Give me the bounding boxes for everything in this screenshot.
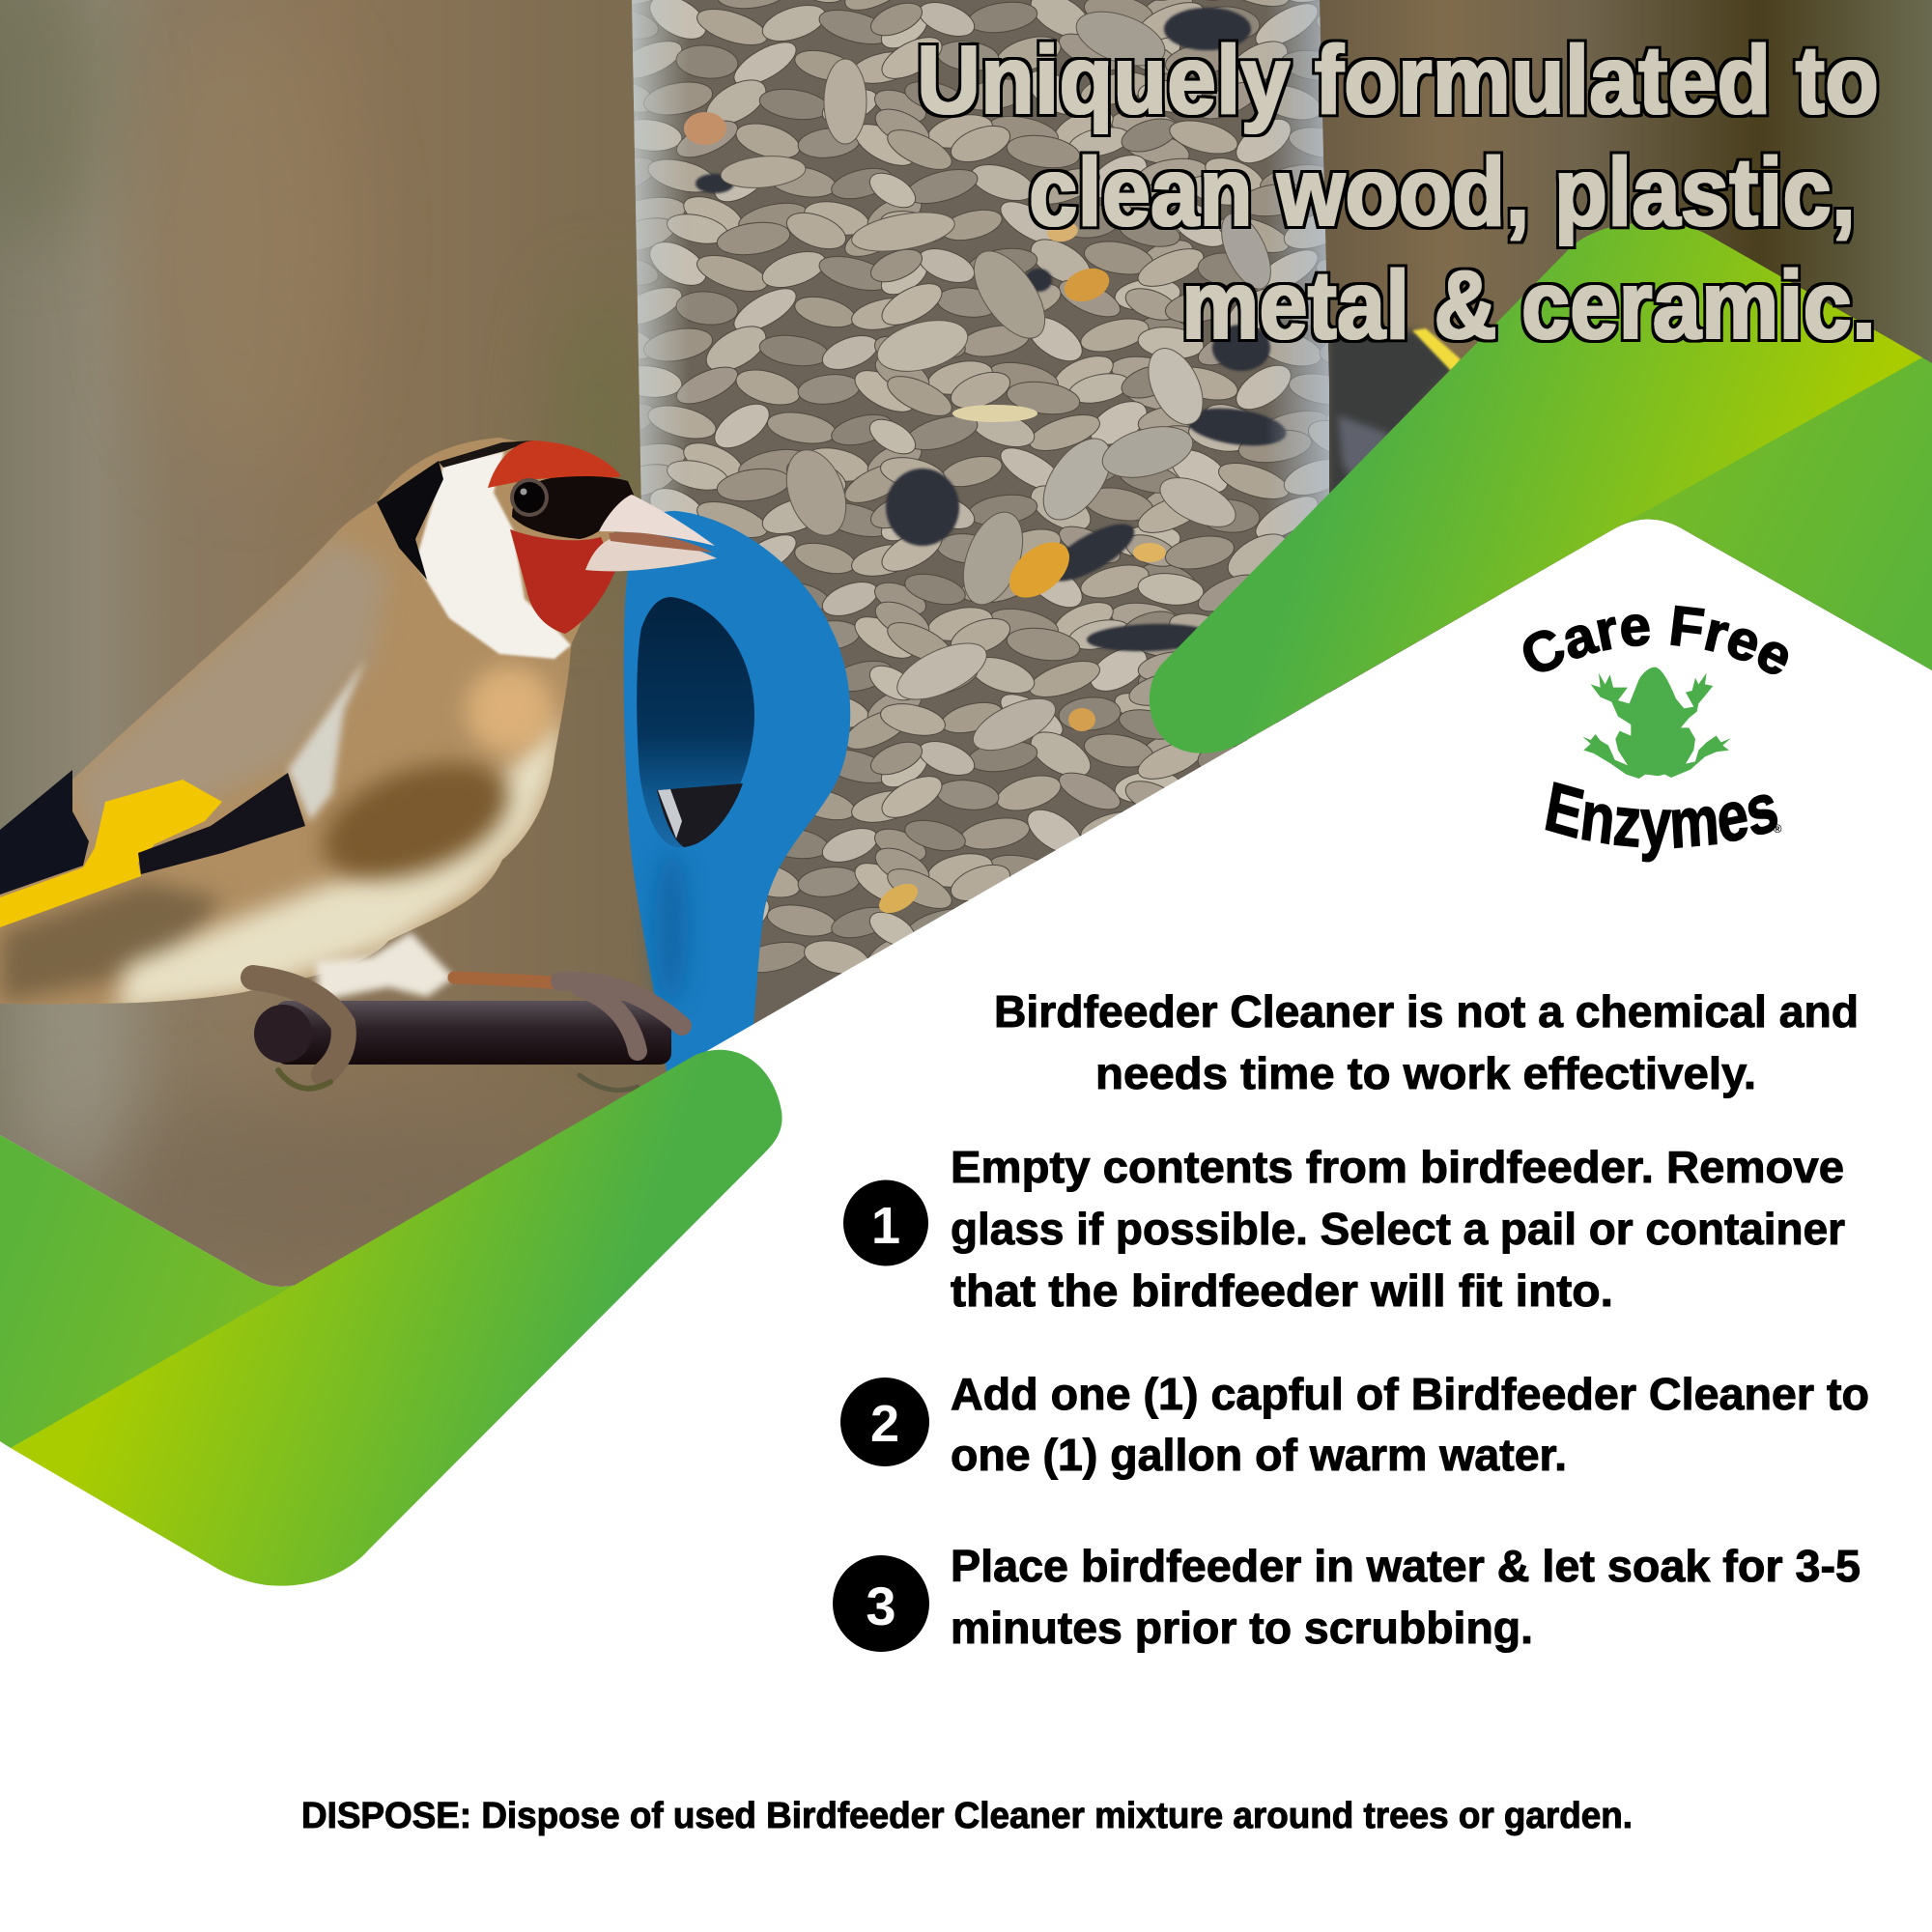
step 1 text: Empty contents from birdfeeder. Remove <box>951 1142 1844 1192</box>
lower left green band: back <box>0 1135 309 1448</box>
logo: Care Free Enzymes <box>1522 605 1789 862</box>
registered mark: ® <box>1774 822 1782 836</box>
logo text: Enzymes: Enzymes <box>1546 781 1777 862</box>
step 3 text: minutes prior to scrubbing. <box>951 1603 1533 1653</box>
step 3 text <box>951 1541 1861 1653</box>
perch <box>275 1001 671 1065</box>
black eye mask <box>512 476 634 539</box>
logo text: Care Free: Care Free <box>1522 605 1789 674</box>
seed fill <box>632 0 1329 974</box>
eye <box>510 478 549 517</box>
step 3 text: Place birdfeeder in water & let soak for 3-5 <box>951 1541 1861 1591</box>
step 1 <box>843 1142 1845 1316</box>
top right green band: front <box>1150 223 1922 753</box>
chest orange <box>467 667 554 753</box>
black wing tip <box>0 770 89 895</box>
belly cream <box>116 715 560 1014</box>
body <box>0 438 618 1004</box>
white wing bar feathers <box>288 659 366 821</box>
step 3 number badge <box>833 1555 929 1652</box>
photo: blurred background <box>0 0 1932 1449</box>
step 1 text: that the birdfeeder will fit into. <box>951 1265 1613 1316</box>
beak upper <box>599 495 715 546</box>
large pale seeds <box>720 1 1281 761</box>
lower left green band: front <box>11 1050 782 1586</box>
other bird behind feeder <box>1328 328 1461 522</box>
perch knob <box>254 1005 312 1063</box>
title: clean wood, plastic, <box>1029 138 1856 246</box>
white content panel <box>0 519 1932 1932</box>
step 2 text <box>951 1369 1869 1480</box>
glass edges <box>632 0 1329 723</box>
logo frog icon <box>1582 668 1731 779</box>
top right green band: back <box>1613 356 1932 670</box>
step 2 number badge: 2 <box>870 1395 899 1453</box>
tail feathers brown <box>0 881 222 1004</box>
crown <box>439 440 533 468</box>
blue feeder port <box>624 511 850 1072</box>
beak lower <box>585 536 717 571</box>
white cheek <box>415 451 571 659</box>
body colouring clipped to silhouette <box>0 536 560 1014</box>
step 1 number badge <box>843 1180 928 1265</box>
feeder tube with seeds <box>624 0 1329 1024</box>
title: metal & ceramic. <box>1181 251 1876 359</box>
black nape stripe <box>377 461 443 580</box>
step 3 number badge: 3 <box>866 1576 896 1636</box>
intro text: Birdfeeder Cleaner is not a chemical and <box>994 986 1859 1037</box>
red cheek <box>510 529 615 634</box>
red forehead <box>488 440 621 488</box>
port shadow <box>656 850 687 1005</box>
goldfinch bird <box>0 438 717 1091</box>
step 1 number badge: 1 <box>871 1197 900 1255</box>
right leg and toes <box>454 978 682 1091</box>
title <box>917 26 1879 359</box>
intro text <box>994 986 1859 1098</box>
wing tan <box>72 536 386 850</box>
step 1 text: glass if possible. Select a pail or container <box>951 1204 1845 1254</box>
disposal note: DISPOSE: Dispose of used Birdfeeder Cleaner mixture around trees or garden. <box>301 1796 1633 1836</box>
step 1 text <box>951 1142 1845 1316</box>
yellow wing patch <box>0 780 222 927</box>
step 2 number badge <box>840 1378 929 1466</box>
intro text: needs time to work effectively. <box>1095 1048 1756 1098</box>
beak stripe <box>609 532 713 553</box>
step 3 <box>833 1541 1861 1653</box>
left foot <box>253 978 344 1089</box>
step 2 text: Add one (1) capful of Birdfeeder Cleaner to <box>951 1369 1869 1419</box>
step 2 <box>840 1369 1869 1480</box>
port hole <box>637 597 754 847</box>
corn and yellow seeds <box>684 112 1166 919</box>
breast brown patch <box>313 753 526 896</box>
window in port <box>657 783 743 847</box>
black wing bar <box>138 773 305 874</box>
step 2 text: one (1) gallon of warm water. <box>951 1430 1567 1480</box>
thigh feathers <box>316 932 454 1001</box>
dark seeds <box>696 8 1289 653</box>
